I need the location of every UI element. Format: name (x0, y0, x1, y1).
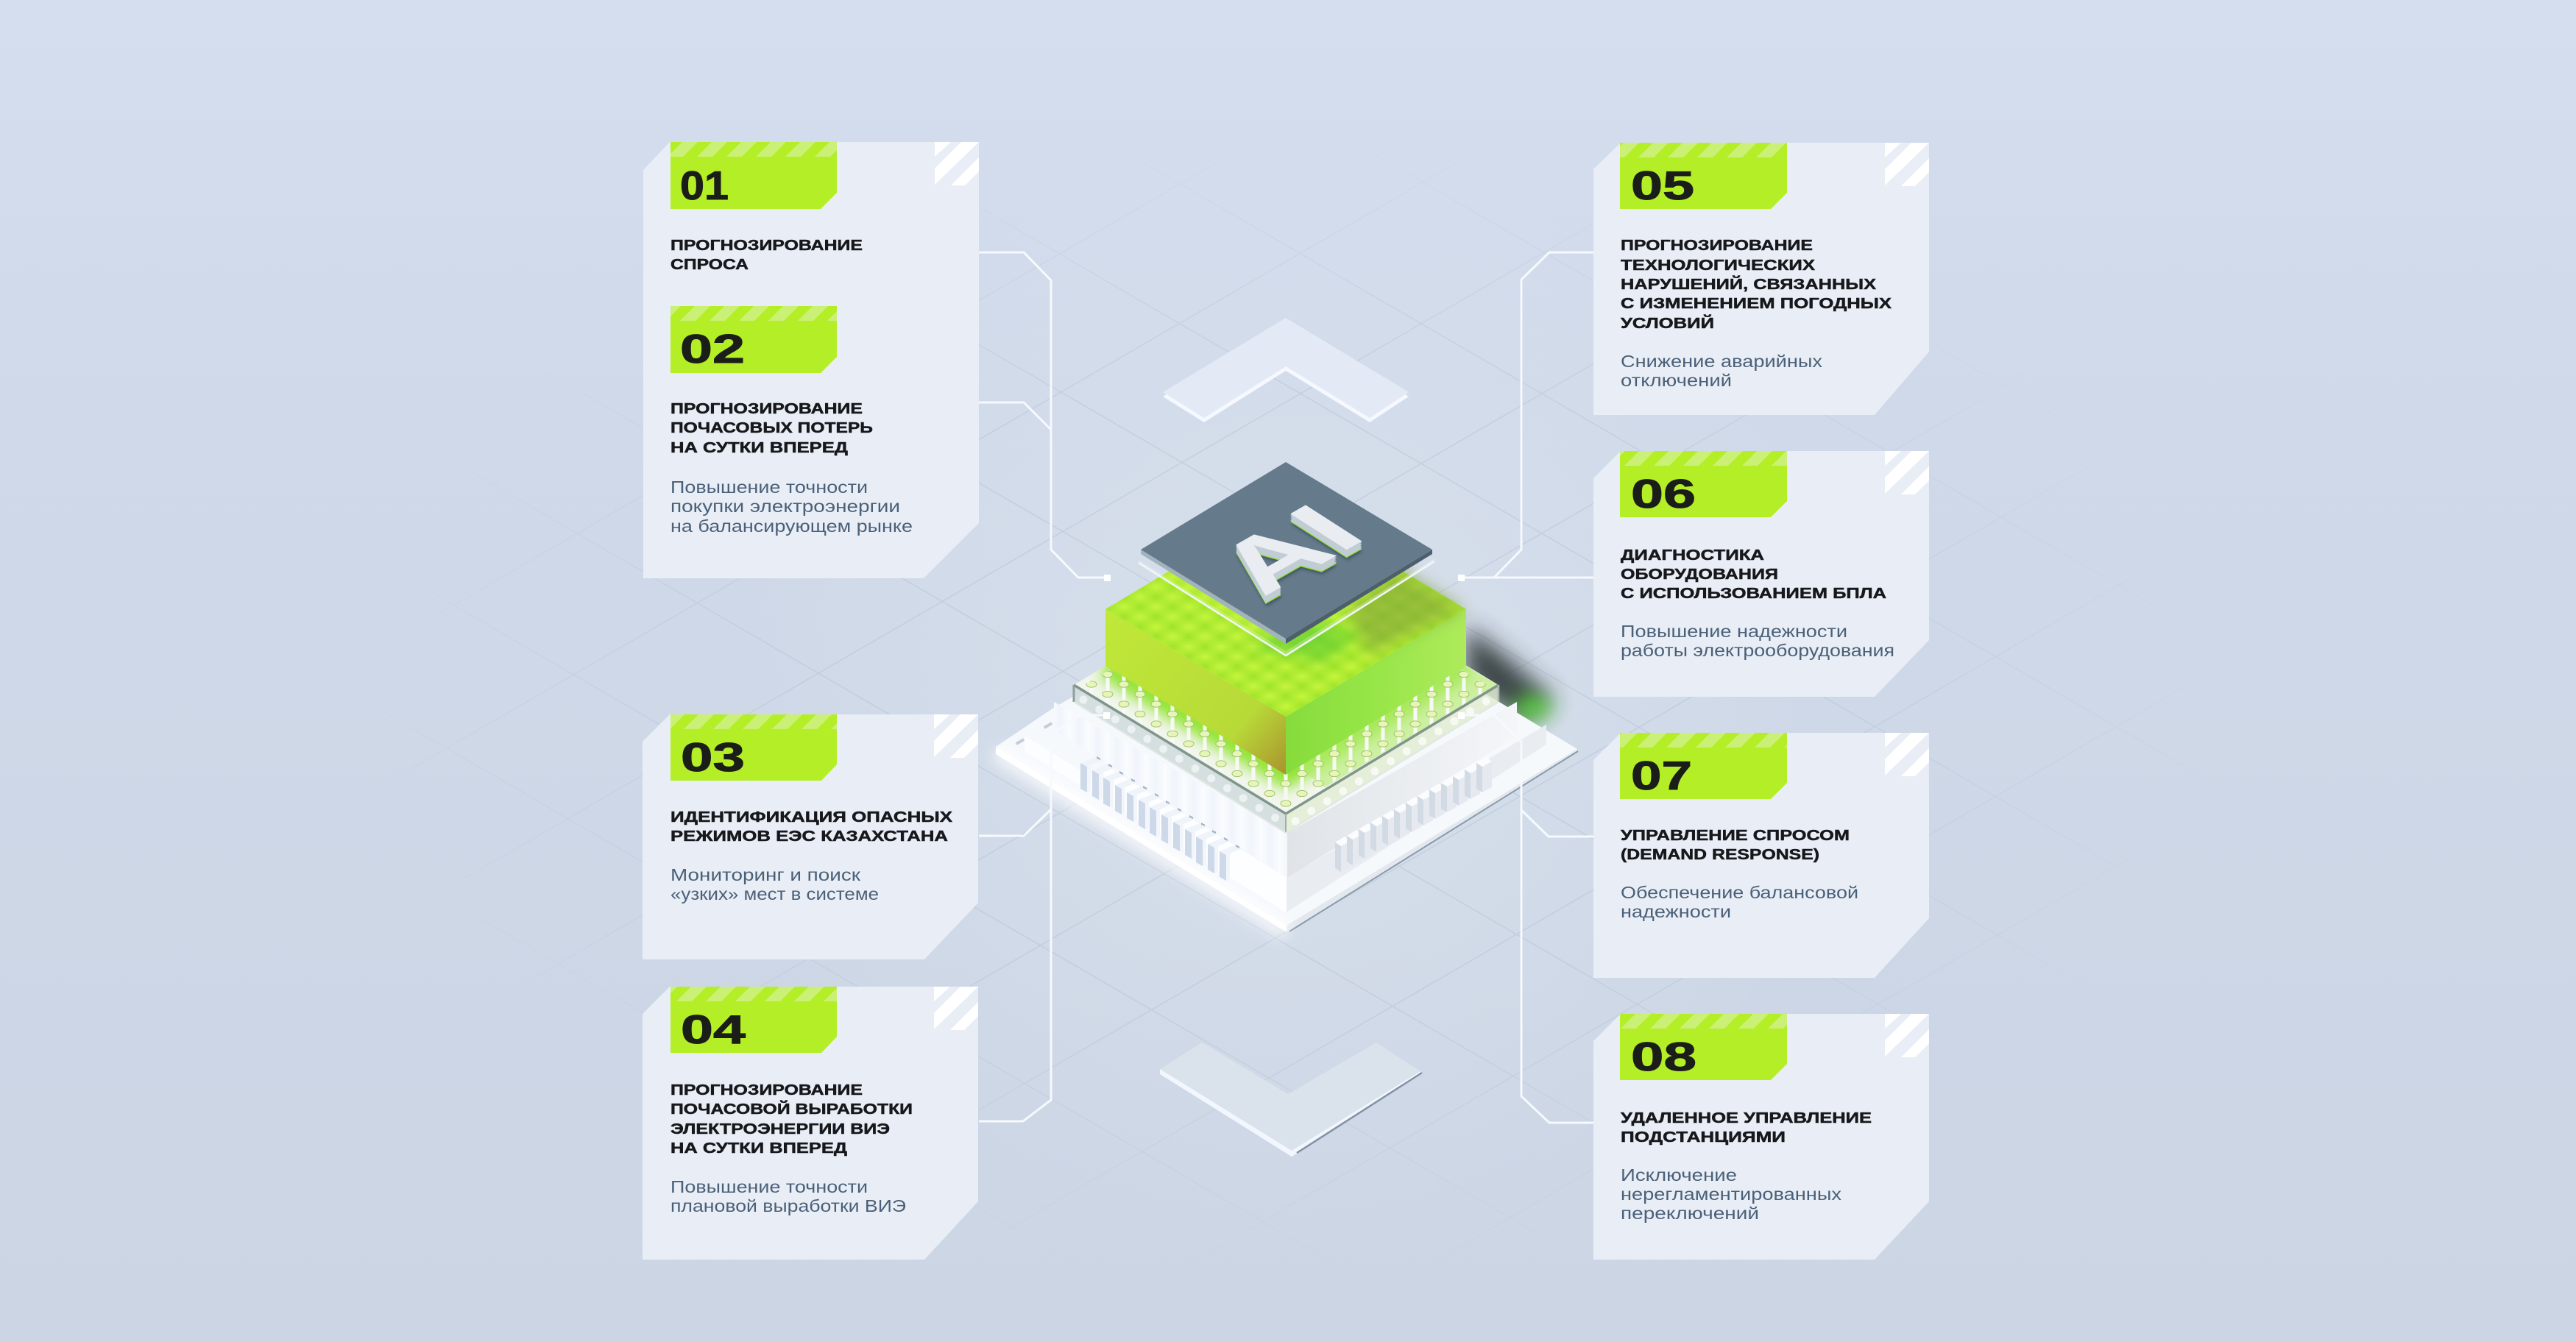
left connector teeth (1080, 756, 1242, 881)
glass sheet (1139, 558, 1434, 656)
body 03: Мониторинг и поиск (670, 865, 861, 884)
badge 05 (1620, 143, 1787, 209)
heading 03: РЕЖИМОВ ЕЭС КАЗАХСТАНА (670, 828, 948, 845)
connector lines right (1461, 252, 1593, 1123)
body 04: Повышение точности (670, 1177, 868, 1196)
heading 04: ПОЧАСОВОЙ ВЫРАБОТКИ (670, 1100, 913, 1118)
heading 05 (1621, 238, 1892, 332)
body 07 (1621, 883, 1858, 921)
platform outer tier (996, 574, 1578, 933)
heading 06 (1621, 547, 1886, 602)
panel: card 08 (1593, 1014, 1929, 1260)
heading 03: ИДЕНТИФИКАЦИЯ ОПАСНЫХ (670, 809, 953, 826)
heading 05: НАРУШЕНИЙ, СВЯЗАННЫХ (1621, 275, 1877, 293)
connector lines left (979, 252, 1107, 1121)
body 02: на балансирующем рынке (670, 516, 913, 536)
badge 01: 01 (680, 163, 729, 208)
right connector teeth (1335, 757, 1492, 872)
heading 01: СПРОСА (670, 257, 749, 273)
panel: card 06 (1593, 451, 1929, 697)
heading 08: ПОДСТАНЦИЯМИ (1621, 1129, 1786, 1146)
badge 07: 07 (1631, 753, 1692, 798)
green translucent block (1105, 501, 1466, 775)
heading 07: (DEMAND RESPONSE) (1621, 847, 1819, 863)
heading 05: ПРОГНОЗИРОВАНИЕ (1621, 238, 1813, 254)
chip illustration (996, 462, 1578, 933)
platform middle tier (1025, 725, 1546, 912)
heading 02: ПРОГНОЗИРОВАНИЕ (670, 401, 863, 417)
body 06: работы электрооборудования (1621, 641, 1894, 660)
body 03 (670, 865, 879, 903)
connector end markers (1103, 575, 1465, 719)
heading 02: ПОЧАСОВЫХ ПОТЕРЬ (670, 420, 873, 436)
heading 01 (670, 238, 863, 273)
lower floating bracket (1160, 1043, 1422, 1157)
heading 02 (670, 401, 873, 456)
body 02 (670, 477, 913, 536)
block shadow and green glow (1466, 625, 1553, 725)
AI plate (1141, 462, 1432, 644)
body 03: «узких» мест в системе (670, 884, 879, 903)
panel: card 07 (1593, 733, 1929, 978)
badge 05: 05 (1631, 163, 1694, 208)
body 07: надежности (1621, 902, 1731, 921)
body 05: Снижение аварийных (1621, 352, 1822, 371)
badge 03 (670, 714, 837, 781)
badge 02: 02 (680, 326, 745, 372)
badge 06: 06 (1631, 471, 1696, 516)
body 04 (670, 1177, 906, 1215)
badge 07 (1620, 733, 1787, 799)
body 04: плановой выработки ВИЭ (670, 1196, 906, 1215)
AI lettering: AI (1189, 489, 1387, 608)
body 05 (1621, 352, 1822, 390)
badge 06 (1620, 451, 1787, 517)
panel: cards 01 and 02 (643, 142, 979, 578)
body 07: Обеспечение балансовой (1621, 883, 1858, 902)
heading 03 (670, 809, 953, 845)
background (574, 322, 1998, 1157)
heading 02: НА СУТКИ ВПЕРЕД (670, 440, 848, 456)
heading 08 (1621, 1110, 1872, 1146)
heading 04: ЭЛЕКТРОЭНЕРГИИ ВИЭ (670, 1121, 890, 1137)
heading 07 (1621, 828, 1850, 863)
heading 06: ДИАГНОСТИКА (1621, 547, 1764, 564)
body 02: покупки электроэнергии (670, 497, 900, 516)
heading 05: С ИЗМЕНЕНИЕМ ПОГОДНЫХ (1621, 296, 1892, 312)
upper floating bracket (1163, 318, 1409, 422)
heading 01: ПРОГНОЗИРОВАНИЕ (670, 238, 863, 254)
body 08: Исключение (1621, 1165, 1737, 1185)
heading 06: С ИСПОЛЬЗОВАНИЕМ БПЛА (1621, 586, 1886, 602)
body 08 (1621, 1165, 1841, 1223)
heading 04: НА СУТКИ ВПЕРЕД (670, 1140, 847, 1157)
heading 05: УСЛОВИЙ (1621, 314, 1714, 332)
body 06 (1621, 622, 1894, 660)
heading 07: УПРАВЛЕНИЕ СПРОСОМ (1621, 828, 1850, 844)
heading 04: ПРОГНОЗИРОВАНИЕ (670, 1082, 863, 1098)
panel: card 05 (1593, 143, 1929, 415)
body 05: отключений (1621, 371, 1732, 390)
platform upper tier (1054, 702, 1517, 878)
body 08: переключений (1621, 1204, 1759, 1223)
badge 04 (670, 987, 837, 1053)
heading 08: УДАЛЕННОЕ УПРАВЛЕНИЕ (1621, 1110, 1872, 1126)
panel: card 03 (643, 714, 978, 959)
body 08: нерегламентированных (1621, 1185, 1841, 1204)
body 06: Повышение надежности (1621, 622, 1847, 641)
badge 02 (670, 306, 837, 373)
badge 03: 03 (681, 734, 745, 780)
glass tray with pins (1073, 665, 1500, 834)
heading 06: ОБОРУДОВАНИЯ (1621, 567, 1778, 583)
badge 08: 08 (1631, 1034, 1696, 1079)
badge 04: 04 (681, 1006, 746, 1052)
panel: card 04 (643, 987, 978, 1260)
badge 08 (1620, 1014, 1787, 1080)
body 02: Повышение точности (670, 477, 868, 497)
badge 01 (670, 142, 837, 209)
heading 04 (670, 1082, 913, 1157)
heading 05: ТЕХНОЛОГИЧЕСКИХ (1621, 258, 1816, 274)
